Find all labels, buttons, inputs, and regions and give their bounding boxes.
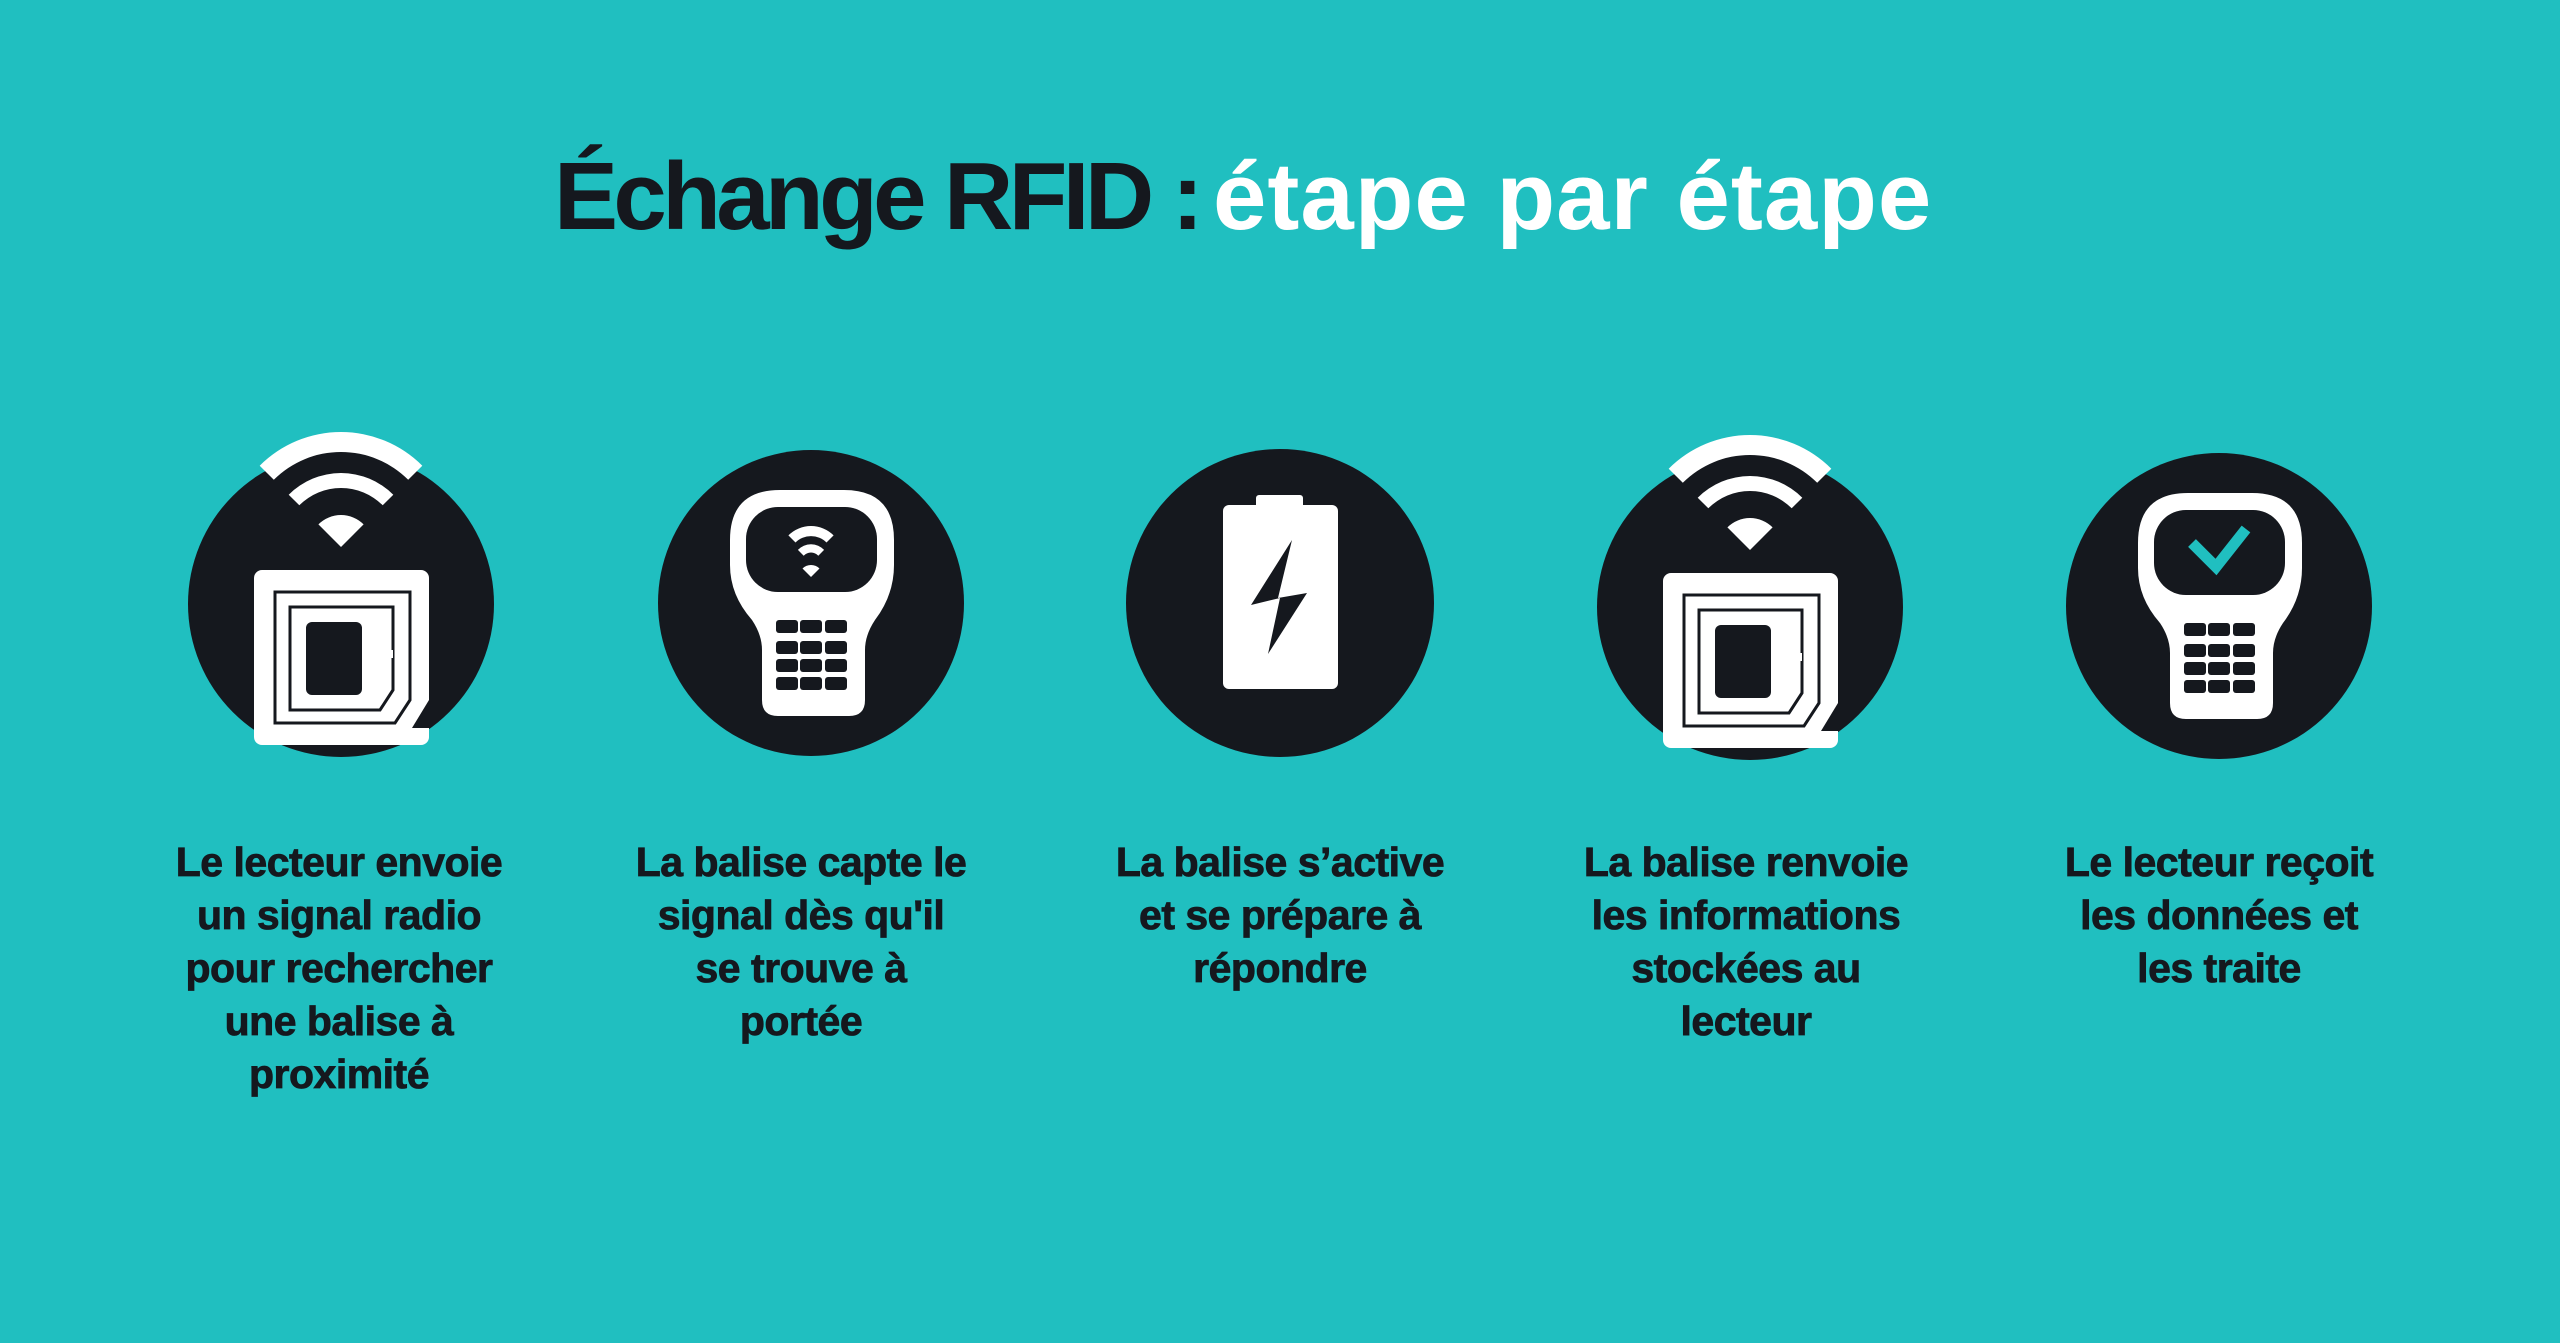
text: step 4: lecteur bbox=[1681, 998, 1812, 1044]
text: step 1: proximité bbox=[249, 1051, 429, 1097]
text: step 2: portée bbox=[740, 998, 862, 1044]
text: step 3: et se prépare à bbox=[1139, 892, 1422, 938]
text: step 1: un signal radio bbox=[197, 892, 481, 938]
title: étape par étape bbox=[1213, 143, 1932, 250]
text: step 1: une balise à bbox=[225, 998, 454, 1044]
icon: reader with wifi (step 2) bbox=[658, 450, 964, 756]
text: step 1: Le lecteur envoie bbox=[176, 839, 502, 885]
text: step 4: les informations bbox=[1592, 892, 1900, 938]
icon: tag with wifi (step 1) bbox=[188, 432, 494, 757]
text: step 5: Le lecteur reçoit bbox=[2065, 839, 2374, 885]
text: step 2: La balise capte le bbox=[636, 839, 966, 885]
icon: tag with wifi (step 4) bbox=[1597, 435, 1903, 760]
text: step 4: La balise renvoie bbox=[1584, 839, 1908, 885]
title: Échange RFID : bbox=[554, 143, 1199, 250]
text: step 1: pour rechercher bbox=[186, 945, 493, 991]
title bbox=[554, 143, 1932, 250]
text: step 3: La balise s’active bbox=[1116, 839, 1444, 885]
icon: reader with check (step 5) bbox=[2066, 453, 2372, 759]
text: step 2: signal dès qu'il bbox=[658, 892, 944, 938]
text: step 2: se trouve à bbox=[696, 945, 907, 991]
text: step 4: stockées au bbox=[1631, 945, 1861, 991]
text: step 5: les données et bbox=[2080, 892, 2359, 938]
text: step 5: les traite bbox=[2137, 945, 2301, 991]
icon: battery (step 3) bbox=[1126, 449, 1434, 757]
text: step 3: répondre bbox=[1193, 945, 1367, 991]
